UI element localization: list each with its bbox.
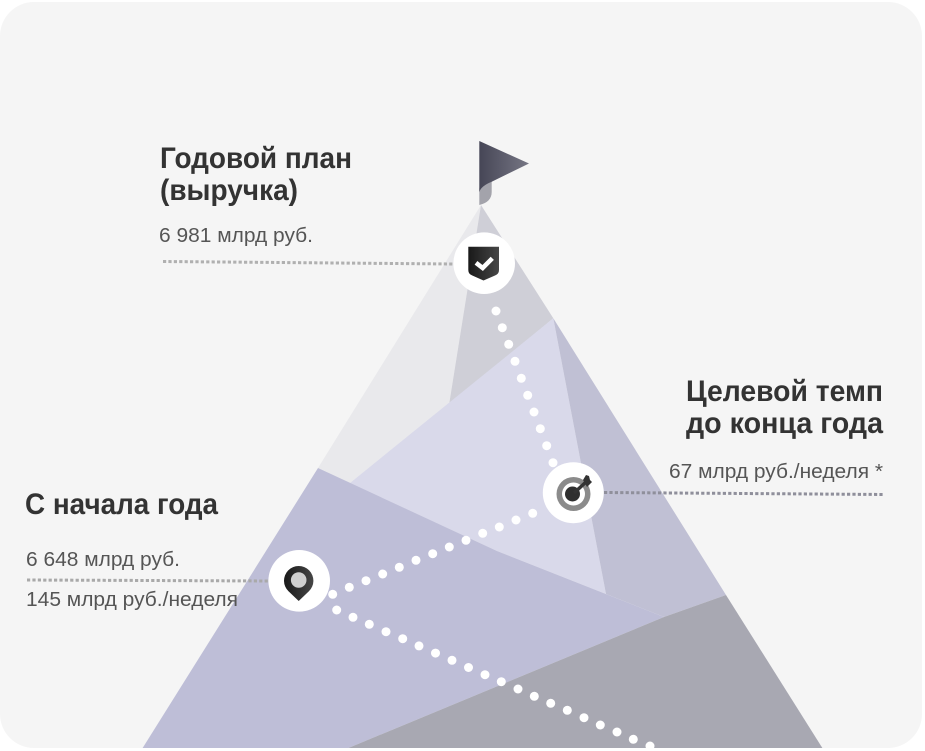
leader line: annual plan xyxy=(163,262,453,264)
value: year to date total: 6 648 млрд руб. xyxy=(26,548,180,571)
leader line: year to date xyxy=(27,580,270,581)
heading: annual plan: (выручка) xyxy=(160,174,298,207)
heading: year to date: С начала года xyxy=(25,488,218,521)
flag icon xyxy=(479,141,529,205)
value: year to date weekly: 145 млрд руб./неделя xyxy=(26,588,238,611)
marker: target xyxy=(543,462,604,523)
marker: shield xyxy=(453,232,515,294)
heading: annual plan xyxy=(160,142,352,207)
marker: location pin xyxy=(268,550,330,612)
value: annual plan: 6 981 млрд руб. xyxy=(159,224,313,247)
value: target pace: 67 млрд руб./неделя * xyxy=(669,460,883,483)
heading: target pace: до конца года xyxy=(686,407,883,440)
leader line: target pace xyxy=(604,492,884,494)
heading: target pace xyxy=(686,375,883,440)
heading: annual plan: Годовой план xyxy=(160,142,352,175)
heading: target pace: Целевой темп xyxy=(686,375,883,408)
dotted route xyxy=(328,306,654,750)
mountain illustration xyxy=(142,205,823,749)
